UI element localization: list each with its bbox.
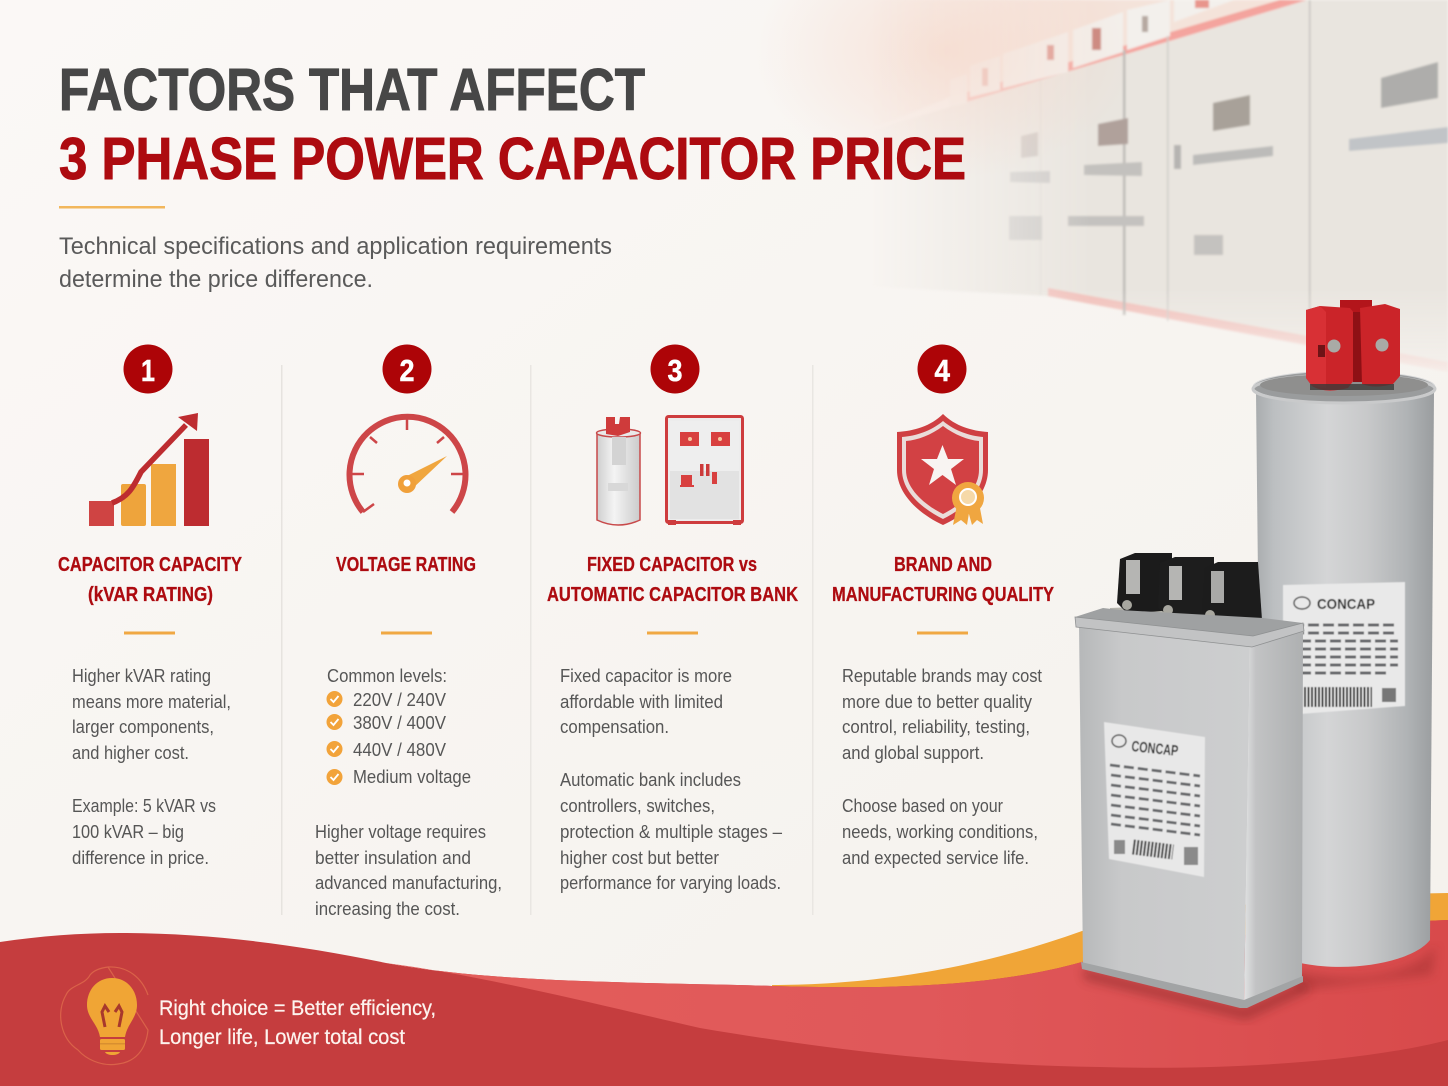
heading: [547, 554, 798, 606]
number badge 4: [918, 344, 966, 394]
panel: fixed vs automatic: [547, 344, 798, 893]
body text: better insulation and: [315, 847, 471, 868]
callout text: Longer life, Lower total cost: [159, 1025, 405, 1049]
heading: CAPACITOR CAPACITY: [58, 554, 243, 576]
icon: automatic capacitor bank: [666, 416, 742, 525]
black terminals: [1110, 553, 1262, 634]
number badge 2: [382, 344, 432, 394]
faded switchgear room photo: [962, 0, 1448, 370]
panel: brand and quality: [832, 344, 1055, 868]
item: 380V / 400V: 380V / 400V: [353, 712, 447, 733]
warm tint: [755, 0, 1135, 180]
light red wave: [386, 920, 1448, 1068]
accent line: [381, 632, 432, 634]
icon: rising bar chart: [89, 413, 209, 526]
product label: CONCAP: [1317, 596, 1375, 613]
body text: larger components,: [72, 716, 214, 737]
body text: 100 kVAR – big: [72, 821, 184, 842]
body text: and expected service life.: [842, 847, 1029, 868]
number badge 1: 1: [141, 353, 155, 388]
heading: FIXED CAPACITOR vs: [587, 554, 757, 576]
body text: Choose based on your: [842, 795, 1003, 816]
title: [59, 57, 966, 192]
body text: compensation.: [560, 716, 669, 737]
body text: [842, 665, 1042, 868]
body text: Example: 5 kVAR vs: [72, 795, 216, 816]
red wave: [0, 920, 1448, 1086]
heading: BRAND AND: [894, 554, 992, 576]
voltage list: [326, 689, 471, 787]
item: 440V / 480V: 440V / 480V: [353, 739, 447, 760]
title: 3 PHASE POWER CAPACITOR PRICE: [59, 126, 966, 192]
body text: control, reliability, testing,: [842, 716, 1030, 737]
item: 220V / 240V: 220V / 240V: [353, 689, 447, 710]
body text: higher cost but better: [560, 847, 719, 868]
product label: [1104, 722, 1205, 877]
rectangular capacitor: [1075, 553, 1312, 1020]
body text: Fixed capacitor is more: [560, 665, 732, 686]
body text: difference in price.: [72, 847, 209, 868]
icon: light bulb: [61, 967, 148, 1065]
icon: mini capacitor: [596, 417, 640, 525]
common levels label: Common levels:: [327, 665, 447, 686]
body text: more due to better quality: [842, 691, 1033, 712]
callout: right choice: [61, 967, 436, 1065]
heading: AUTOMATIC CAPACITOR BANK: [547, 584, 798, 606]
number badge 1: [124, 344, 172, 394]
body text: means more material,: [72, 691, 231, 712]
heading: (kVAR RATING): [88, 584, 213, 606]
number badge 4: 4: [934, 353, 951, 388]
icon: shield with star and rosette: [897, 414, 988, 525]
subtitle: determine the price difference.: [59, 266, 373, 293]
number badge 3: 3: [668, 353, 682, 388]
heading: [58, 554, 243, 606]
number badge 3: [650, 344, 700, 394]
body text: Higher voltage requires: [315, 821, 486, 842]
body text: protection & multiple stages –: [560, 821, 783, 842]
title accent line: [59, 206, 165, 208]
subtitle: Technical specifications and application requirements: [59, 233, 612, 260]
subtitle: [59, 233, 612, 293]
number badge 2: 2: [400, 353, 414, 388]
cylindrical capacitor: [1253, 300, 1436, 990]
body text: performance for varying loads.: [560, 872, 781, 893]
icon: voltage gauge: [349, 416, 465, 512]
body text: controllers, switches,: [560, 795, 715, 816]
body text: increasing the cost.: [315, 898, 460, 919]
footer wave: [0, 893, 1448, 1086]
product label: CONCAP: [1131, 738, 1179, 760]
title: FACTORS THAT AFFECT: [59, 57, 645, 123]
body text: Reputable brands may cost: [842, 665, 1042, 686]
panel: capacitor capacity: [58, 344, 243, 868]
body text: advanced manufacturing,: [315, 872, 502, 893]
accent line: [647, 632, 698, 634]
heading: [832, 554, 1055, 606]
item: medium voltage: Medium voltage: [353, 766, 471, 787]
red terminals: [1306, 300, 1400, 391]
callout text: Right choice = Better efficiency,: [159, 996, 436, 1020]
callout text: [159, 996, 436, 1049]
orange wave: [772, 893, 1448, 1000]
product label: [1283, 582, 1405, 714]
box body: [1075, 608, 1304, 1008]
body text: affordable with limited: [560, 691, 723, 712]
body text: needs, working conditions,: [842, 821, 1038, 842]
body text: Automatic bank includes: [560, 769, 741, 790]
accent line: [917, 632, 968, 634]
heading: VOLTAGE RATING: [336, 554, 476, 576]
body text: Higher kVAR rating: [72, 665, 211, 686]
accent line: [124, 632, 175, 634]
body text: and higher cost.: [72, 742, 189, 763]
body text: and global support.: [842, 742, 984, 763]
body text: [560, 665, 783, 893]
heading: MANUFACTURING QUALITY: [832, 584, 1055, 606]
body text: [72, 665, 231, 868]
body text: [315, 821, 502, 919]
panel: voltage rating: [315, 344, 502, 919]
